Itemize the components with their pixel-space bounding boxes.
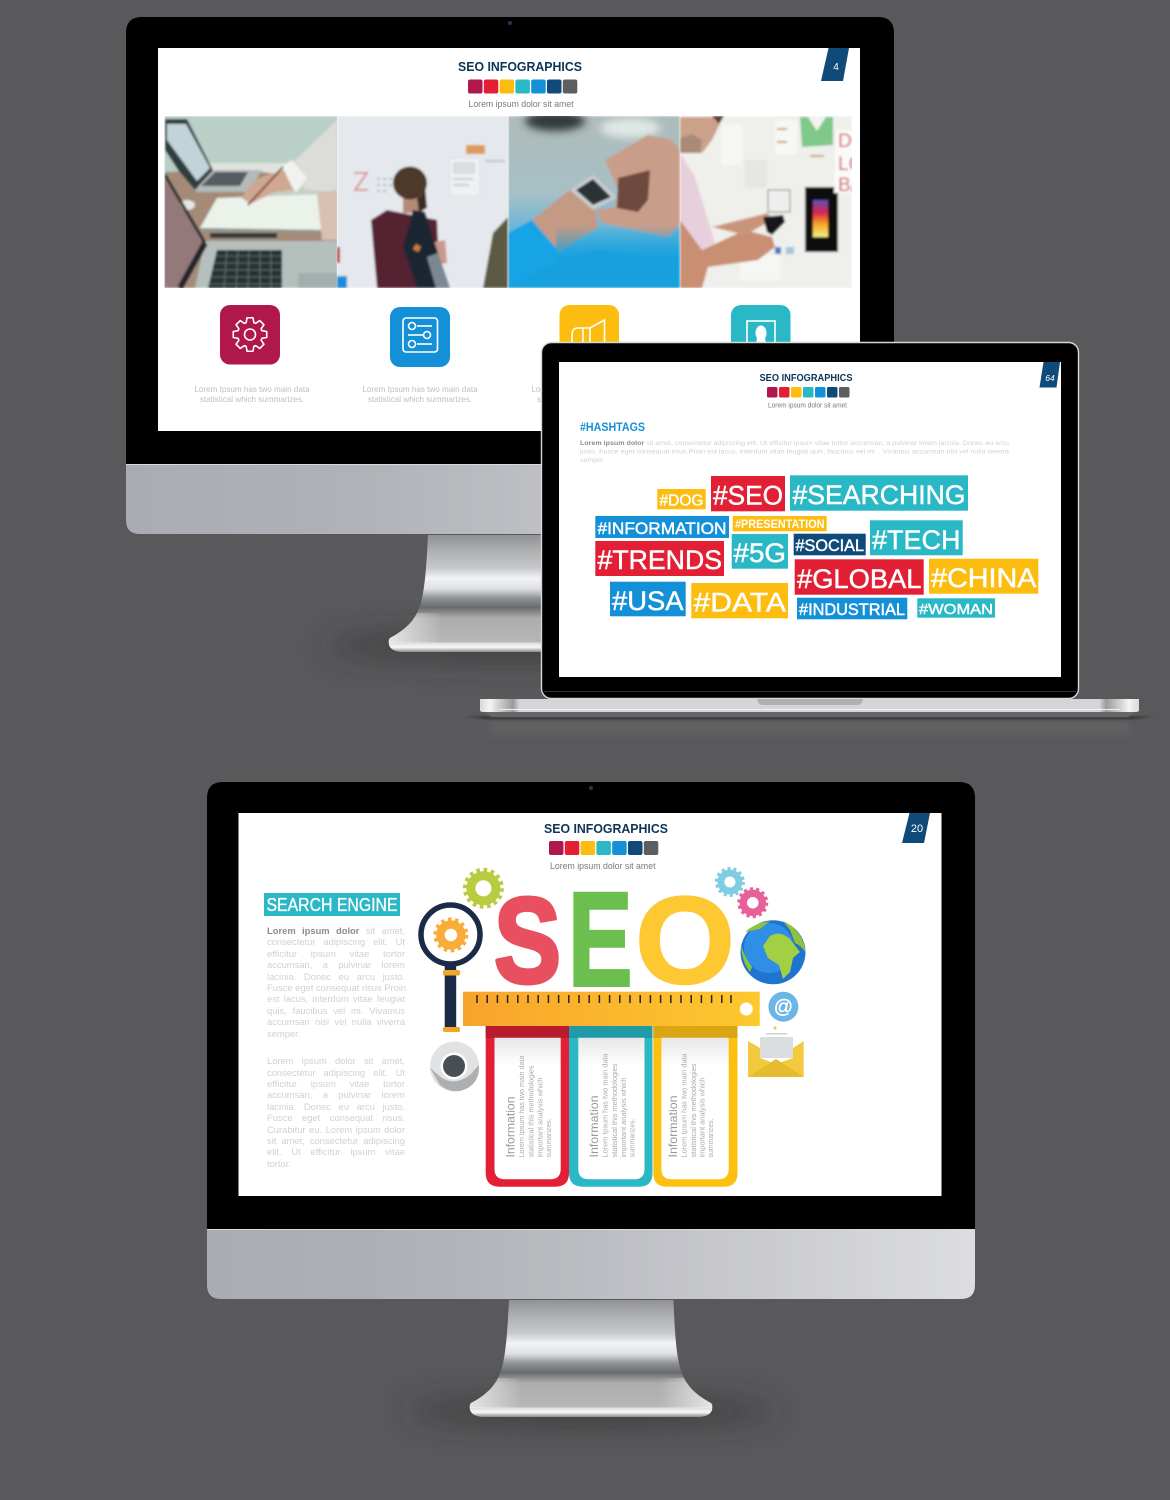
monitor: top desktop with features slide — [126, 17, 894, 659]
body text: semper. — [580, 457, 605, 464]
icon: globe — [740, 920, 806, 984]
card: teal information: important analysis which — [619, 1078, 628, 1158]
colour swatches — [468, 80, 577, 94]
tag: woman: #WOMAN — [919, 601, 993, 618]
slide subtitle: Lorem ipsum dolor sit amet — [468, 99, 574, 110]
captions under icons: statistical which summarizes. — [200, 395, 304, 404]
slide subtitle: Lorem ipsum dolor sit amet — [768, 400, 847, 410]
slide: features — [158, 48, 860, 431]
letter E: E — [568, 866, 632, 1014]
photo: man with phone: DC — [838, 131, 865, 152]
photo: laptops and notebook — [164, 116, 338, 288]
body text paragraphs: sit amet, consectetur adipiscing — [267, 1135, 405, 1146]
body text paragraphs: quis, faucibus vel mi. Vivamus — [267, 1005, 405, 1016]
monitor: bottom desktop with SEO slide — [207, 782, 975, 1424]
icon: pink gear — [739, 889, 766, 916]
body text paragraphs: accumsan nisi vel nulla viverra — [267, 1016, 405, 1027]
laptop lid — [542, 342, 1078, 698]
slide title: SEO INFOGRAPHICS — [544, 821, 668, 836]
body text: justo. Fusce eget consequat risus Proin est lacus, interdum vitae feugiat quis, faucibus vel mi. . Vivamus accumsan nisi vel nulla viverra — [579, 448, 1009, 456]
heading: hashtags: #HASHTAGS — [580, 422, 645, 434]
captions under icons: statistical which summarizes. — [537, 395, 641, 404]
icon: sliders tile — [390, 307, 450, 367]
card: teal information: Lorem Ipsum has two main data — [600, 1053, 610, 1158]
body text paragraphs: semper. — [267, 1028, 300, 1039]
icon: eye badge — [430, 1042, 479, 1092]
card: yellow information: Lorem Ipsum has two main data — [680, 1053, 688, 1158]
tag: industrial: #INDUSTRIAL — [799, 601, 905, 619]
icon: green gear — [465, 870, 501, 906]
tag: global: #GLOBAL — [797, 564, 922, 594]
tag: trends: #TRENDS — [598, 545, 722, 575]
body text paragraphs: accumsan, a pulvinar lorem — [267, 1089, 405, 1100]
icon: magnifier — [421, 905, 480, 1032]
card: teal information: Information — [587, 1096, 601, 1158]
slide title: SEO INFOGRAPHICS — [760, 373, 853, 384]
icon: megaphone tile — [560, 305, 619, 365]
card: red information: Lorem Ipsum has two main data — [517, 1055, 526, 1158]
card: yellow information: Information — [666, 1096, 680, 1158]
heading: search engine: SEARCH ENGINE — [266, 895, 398, 915]
photo: man with phone: BA — [838, 175, 864, 196]
body text paragraphs: elit. Ut efficitur ipsum vitae — [267, 1146, 405, 1157]
icon: at sign badge — [768, 992, 798, 1022]
tag: seo: #SEO — [713, 480, 783, 510]
body text: Lorem ipsum dolor sit amet, consectetur adipiscing elit. Ut efficitur ipsum vitae tortor accumsan, a pulvinar lorem lacinia. Donec eu arcu — [580, 440, 1009, 447]
tag: information: #INFORMATION — [598, 519, 726, 538]
tag: usa: #USA — [612, 586, 684, 616]
body text paragraphs: consectetur adipiscing elit. Ut — [267, 1067, 405, 1078]
card: red information: summarizes. — [544, 1118, 553, 1158]
body text paragraphs: Lorem ipsum dolor sit amet, — [267, 925, 405, 936]
tag: 5g: #5G — [734, 538, 786, 568]
body text paragraphs: est lacus, interdum vitae feugiat — [267, 993, 405, 1004]
body text paragraphs: lacinia. Donec eu arcu justo. — [267, 1101, 405, 1112]
photo: man with phone — [680, 116, 865, 288]
icon: envelope — [748, 1026, 804, 1077]
ruler — [463, 992, 760, 1026]
tag: searching: #SEARCHING — [792, 480, 966, 510]
hashtag cloud — [595, 475, 1038, 619]
photo: man at whiteboard — [337, 116, 509, 288]
icon: at sign badge: @ — [774, 997, 793, 1018]
card: red information — [486, 1026, 569, 1187]
card: teal information — [569, 1026, 652, 1187]
slide: hashtags — [559, 362, 1061, 677]
slide subtitle: Lorem ipsum dolor sit amet — [550, 861, 656, 872]
letter O: O — [635, 872, 735, 1010]
photo: man with phone: LC — [838, 154, 862, 175]
body text paragraphs: consectetur adipiscing elit. Ut — [267, 936, 405, 947]
tag: china: #CHINA — [931, 563, 1036, 593]
body text paragraphs: Curabitur eu. Lorem ipsum dolor — [267, 1124, 405, 1135]
captions under icons — [194, 385, 647, 404]
captions under icons: Lorem Ipsum has two main data — [362, 385, 478, 394]
page tab: 4 — [833, 62, 839, 73]
body text — [579, 440, 1009, 464]
icon: blue gear — [717, 869, 743, 895]
captions under icons: Lorem Ipsum has two main data — [531, 385, 647, 394]
captions under icons: statistical which summarizes. — [368, 395, 472, 404]
tag: tech: #TECH — [872, 525, 960, 555]
laptop: hashtags slide — [465, 342, 1155, 735]
tag: data: #DATA — [694, 588, 786, 618]
card: yellow information: important analysis which — [698, 1078, 706, 1158]
body text paragraphs: Lorem ipsum dolor sit amet, — [267, 1055, 405, 1066]
colour swatches — [767, 387, 850, 398]
body text paragraphs — [267, 925, 407, 1175]
laptop notch — [757, 699, 863, 705]
photo: smartwatch — [508, 111, 680, 288]
icon: portrait tile — [731, 305, 790, 365]
monitor frame bottom — [207, 782, 975, 1424]
body text paragraphs: efficitur ipsum vitae tortor — [267, 948, 405, 959]
captions under icons: Lorem Ipsum has two main data — [194, 385, 310, 394]
SEO graphic — [421, 866, 806, 1187]
body text paragraphs: efficitur ipsum vitae tortor — [267, 1078, 405, 1089]
page tab: 20 — [911, 823, 923, 835]
card: red information: important analysis which — [536, 1078, 544, 1158]
icon: gear tile — [220, 305, 280, 364]
page tab: 64 — [1045, 373, 1055, 383]
tag: social: #SOCIAL — [796, 537, 864, 555]
tag: presentation: #PRESENTATION — [735, 518, 824, 531]
tag: dog: #DOG — [660, 492, 704, 509]
monitor frame top — [126, 17, 894, 659]
card: yellow information — [653, 1026, 738, 1187]
card: yellow information: summarizes. — [706, 1118, 715, 1158]
card: teal information: summarizes. — [628, 1118, 636, 1158]
page tab — [821, 48, 849, 81]
slide title: SEO INFOGRAPHICS — [458, 59, 582, 74]
slide: SEO — [238, 813, 942, 1196]
letter S: S — [494, 872, 561, 1008]
card: red information: Information — [504, 1096, 518, 1158]
card: red information: statistical this methodologies — [526, 1065, 536, 1158]
body text paragraphs: Fusce eget consequat risus Proin — [267, 982, 406, 993]
colour swatches — [549, 841, 658, 855]
card: teal information: statistical this methodologies — [610, 1063, 619, 1158]
body text paragraphs: tortor. — [267, 1158, 291, 1169]
page tab — [902, 813, 930, 843]
page tab — [1040, 362, 1060, 388]
card: yellow information: statistical this methodologies — [689, 1063, 698, 1158]
body text paragraphs: accumsan, a pulvinar lorem — [267, 959, 405, 970]
body text paragraphs: Fusce eget consequat risus. — [267, 1112, 405, 1123]
body text paragraphs: lacinia. Donec eu arcu justo. — [267, 971, 405, 982]
laptop base — [465, 699, 1155, 735]
